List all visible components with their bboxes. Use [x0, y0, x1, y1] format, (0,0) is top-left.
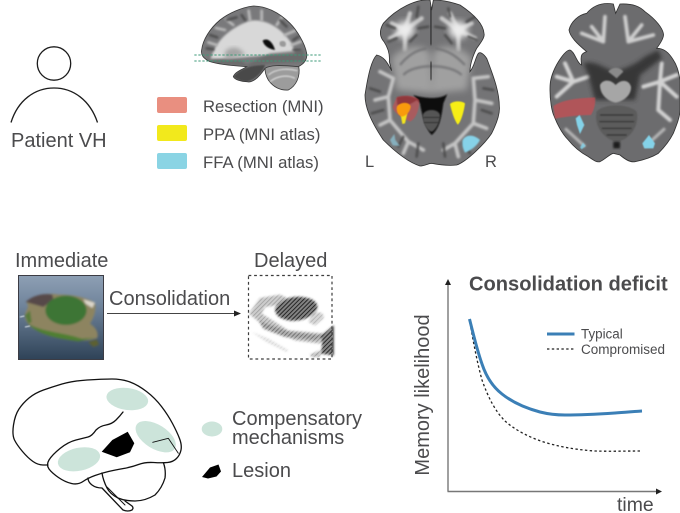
legend text: lesion: Lesion — [232, 460, 291, 482]
legend text: compensatory mechanisms: Compensatory — [232, 408, 362, 430]
label: PPA: PPA (MNI atlas) — [203, 125, 320, 144]
y axis — [445, 279, 451, 492]
label: resection: Resection (MNI) — [203, 97, 324, 116]
FFA left — [390, 134, 400, 146]
heading: Delayed: Delayed — [254, 250, 327, 272]
legend icon: lesion — [202, 464, 221, 478]
cerebellum — [265, 64, 299, 90]
label: FFA: FFA (MNI atlas) — [203, 153, 319, 172]
compensatory region: temporal — [56, 444, 102, 475]
x axis — [448, 488, 662, 494]
label: Patient VH: Patient VH — [11, 130, 107, 152]
line: compromised — [470, 323, 642, 451]
legend: typical — [547, 326, 623, 342]
PPA right — [450, 101, 465, 125]
FFA overlay right — [642, 135, 655, 148]
chart: consolidation deficit — [412, 274, 668, 513]
resection overlay — [553, 97, 595, 119]
sagittal brain scan with slice lines — [194, 6, 321, 90]
heading: Immediate: Immediate — [15, 250, 108, 272]
cerebrum — [201, 6, 308, 82]
swatch: resection — [157, 97, 187, 113]
chart title: Consolidation deficit — [469, 274, 668, 296]
lesion — [102, 432, 134, 457]
resection overlay — [393, 96, 419, 122]
PPA left — [401, 113, 407, 124]
swatch: PPA — [157, 125, 187, 141]
side label: R: R — [485, 153, 497, 171]
slice lines — [194, 55, 322, 61]
FFA overlay small — [580, 143, 586, 149]
legend: typical: Typical — [581, 326, 623, 342]
resection overlay core — [397, 96, 417, 105]
compensatory region: parietal — [105, 385, 150, 413]
legend text: compensatory mechanisms: mechanisms — [232, 427, 344, 449]
legend: compromised: Compromised — [581, 342, 665, 357]
brain contour — [13, 379, 181, 511]
side label: L: L — [365, 153, 374, 171]
axial brain scan 1 — [360, 0, 503, 167]
legend: brain regions — [157, 97, 324, 172]
FFA overlay left — [576, 115, 584, 134]
line: typical — [470, 319, 642, 415]
swatch: FFA — [157, 153, 187, 169]
image: degraded sketch — [248, 275, 334, 360]
brain outline with compensatory regions and lesion — [13, 379, 181, 511]
axial brain scan 2 — [545, 0, 680, 167]
label: Consolidation: Consolidation — [109, 288, 230, 310]
FFA right — [462, 136, 480, 153]
photo: island — [18, 275, 104, 360]
legend icon: compensatory — [202, 422, 222, 436]
legend text: compensatory mechanisms — [232, 408, 362, 449]
icon: patient figure — [11, 47, 98, 122]
y axis label: Memory likelihood — [412, 314, 434, 476]
compensatory region: occipital — [130, 415, 181, 459]
arrow: consolidation — [107, 310, 241, 316]
PPA and resection overlap — [397, 103, 411, 117]
